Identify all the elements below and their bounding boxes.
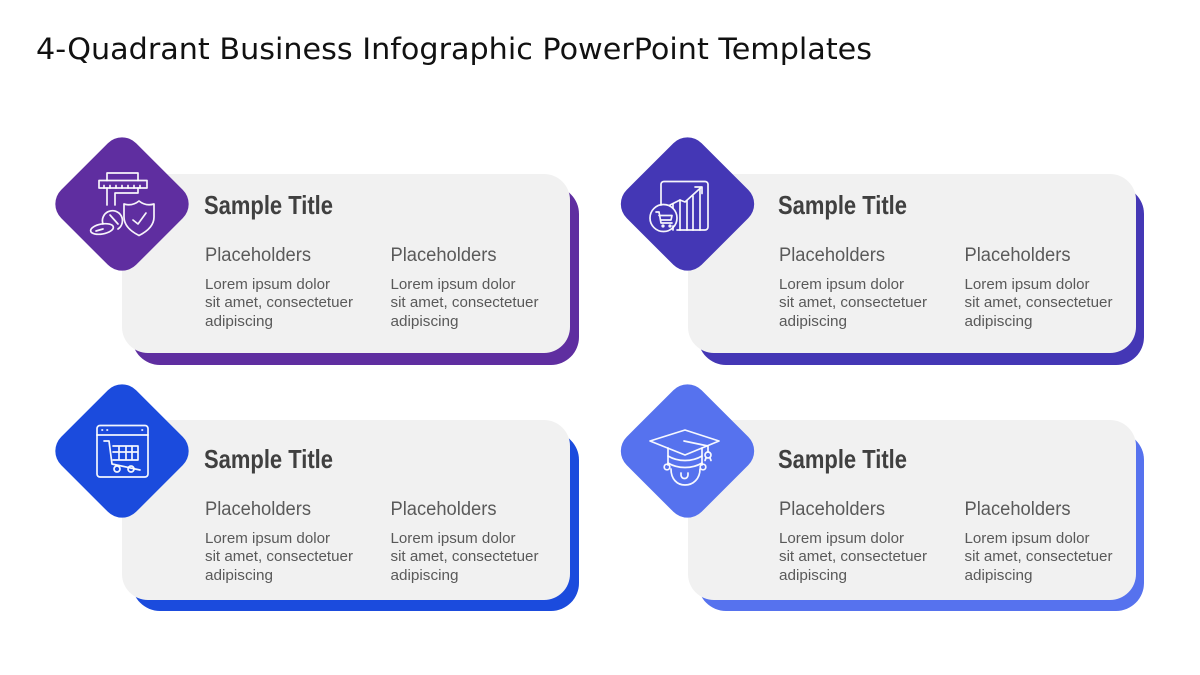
panel: top-right card <box>613 129 1144 365</box>
diamond badge: blue <box>47 376 197 526</box>
text block: right column: adipiscing <box>390 567 458 584</box>
text block: left column: adipiscing <box>205 567 273 584</box>
text block: right column: Placeholders <box>390 499 496 520</box>
text block: left column: adipiscing <box>779 567 847 584</box>
text block: left column: adipiscing <box>205 313 273 330</box>
text block: left column: Placeholders <box>205 499 311 520</box>
text block: right column: adipiscing <box>964 567 1032 584</box>
card body <box>122 174 570 353</box>
card shadow: purple <box>132 186 579 365</box>
diamond badge: purple <box>47 129 197 279</box>
text block: left column: adipiscing <box>779 313 847 330</box>
card shadow: periwinkle <box>698 432 1144 611</box>
text block: right column: Placeholders <box>964 499 1070 520</box>
text block: right column: adipiscing <box>390 313 458 330</box>
diamond badge: indigo <box>613 129 762 279</box>
panel: bottom-right card <box>613 376 1144 611</box>
text block: left column: Lorem ipsum dolor <box>779 276 904 293</box>
card body <box>688 420 1136 600</box>
icon: web shop cart <box>97 426 148 477</box>
text block: right column <box>390 499 539 584</box>
card shadow: indigo <box>698 186 1144 365</box>
text block: left column: sit amet, consectetuer <box>205 548 353 565</box>
text block: right column: sit amet, consectetuer <box>964 548 1113 565</box>
heading: sample title: Sample Title <box>204 190 333 220</box>
text block: right column <box>390 245 539 330</box>
text block: right column: sit amet, consectetuer <box>964 294 1113 311</box>
icon: ruler, pills and shield <box>90 173 154 236</box>
text block: left column <box>779 499 927 584</box>
panel: top-left card <box>47 129 579 365</box>
text block: right column: Placeholders <box>964 245 1070 266</box>
card body <box>122 420 570 600</box>
text block: right column: Lorem ipsum dolor <box>390 276 516 293</box>
text block: left column: Lorem ipsum dolor <box>779 530 904 547</box>
text block: right column <box>964 245 1113 330</box>
text block: left column: sit amet, consectetuer <box>779 548 927 565</box>
text block: right column: Placeholders <box>390 245 496 266</box>
heading: sample title: Sample Title <box>204 444 333 474</box>
text block: left column: Placeholders <box>779 245 885 266</box>
icon: sales chart with cart <box>650 181 708 232</box>
text block: right column: Lorem ipsum dolor <box>390 530 516 547</box>
text block: left column: Placeholders <box>779 499 885 520</box>
card body <box>688 174 1136 353</box>
text block: right column: Lorem ipsum dolor <box>964 276 1090 293</box>
heading: sample title: Sample Title <box>778 190 907 220</box>
text block: right column: sit amet, consectetuer <box>390 294 539 311</box>
text block: left column <box>205 245 353 330</box>
heading: sample title: Sample Title <box>778 444 907 474</box>
text block: left column: sit amet, consectetuer <box>205 294 353 311</box>
card shadow: blue <box>132 432 579 611</box>
text block: left column: Placeholders <box>205 245 311 266</box>
text block: right column: adipiscing <box>964 313 1032 330</box>
text block: left column: sit amet, consectetuer <box>779 294 927 311</box>
text block: left column: Lorem ipsum dolor <box>205 530 330 547</box>
text block: right column: Lorem ipsum dolor <box>964 530 1090 547</box>
text block: left column: Lorem ipsum dolor <box>205 276 330 293</box>
text block: left column <box>779 245 927 330</box>
panel: bottom-left card <box>47 376 579 611</box>
text block: right column: sit amet, consectetuer <box>390 548 539 565</box>
text block: right column <box>964 499 1113 584</box>
diamond badge: periwinkle <box>613 376 762 526</box>
icon: graduate with cap <box>650 430 719 485</box>
text block: left column <box>205 499 353 584</box>
title: 4-Quadrant Business Infographic PowerPoint Templates <box>36 32 872 66</box>
